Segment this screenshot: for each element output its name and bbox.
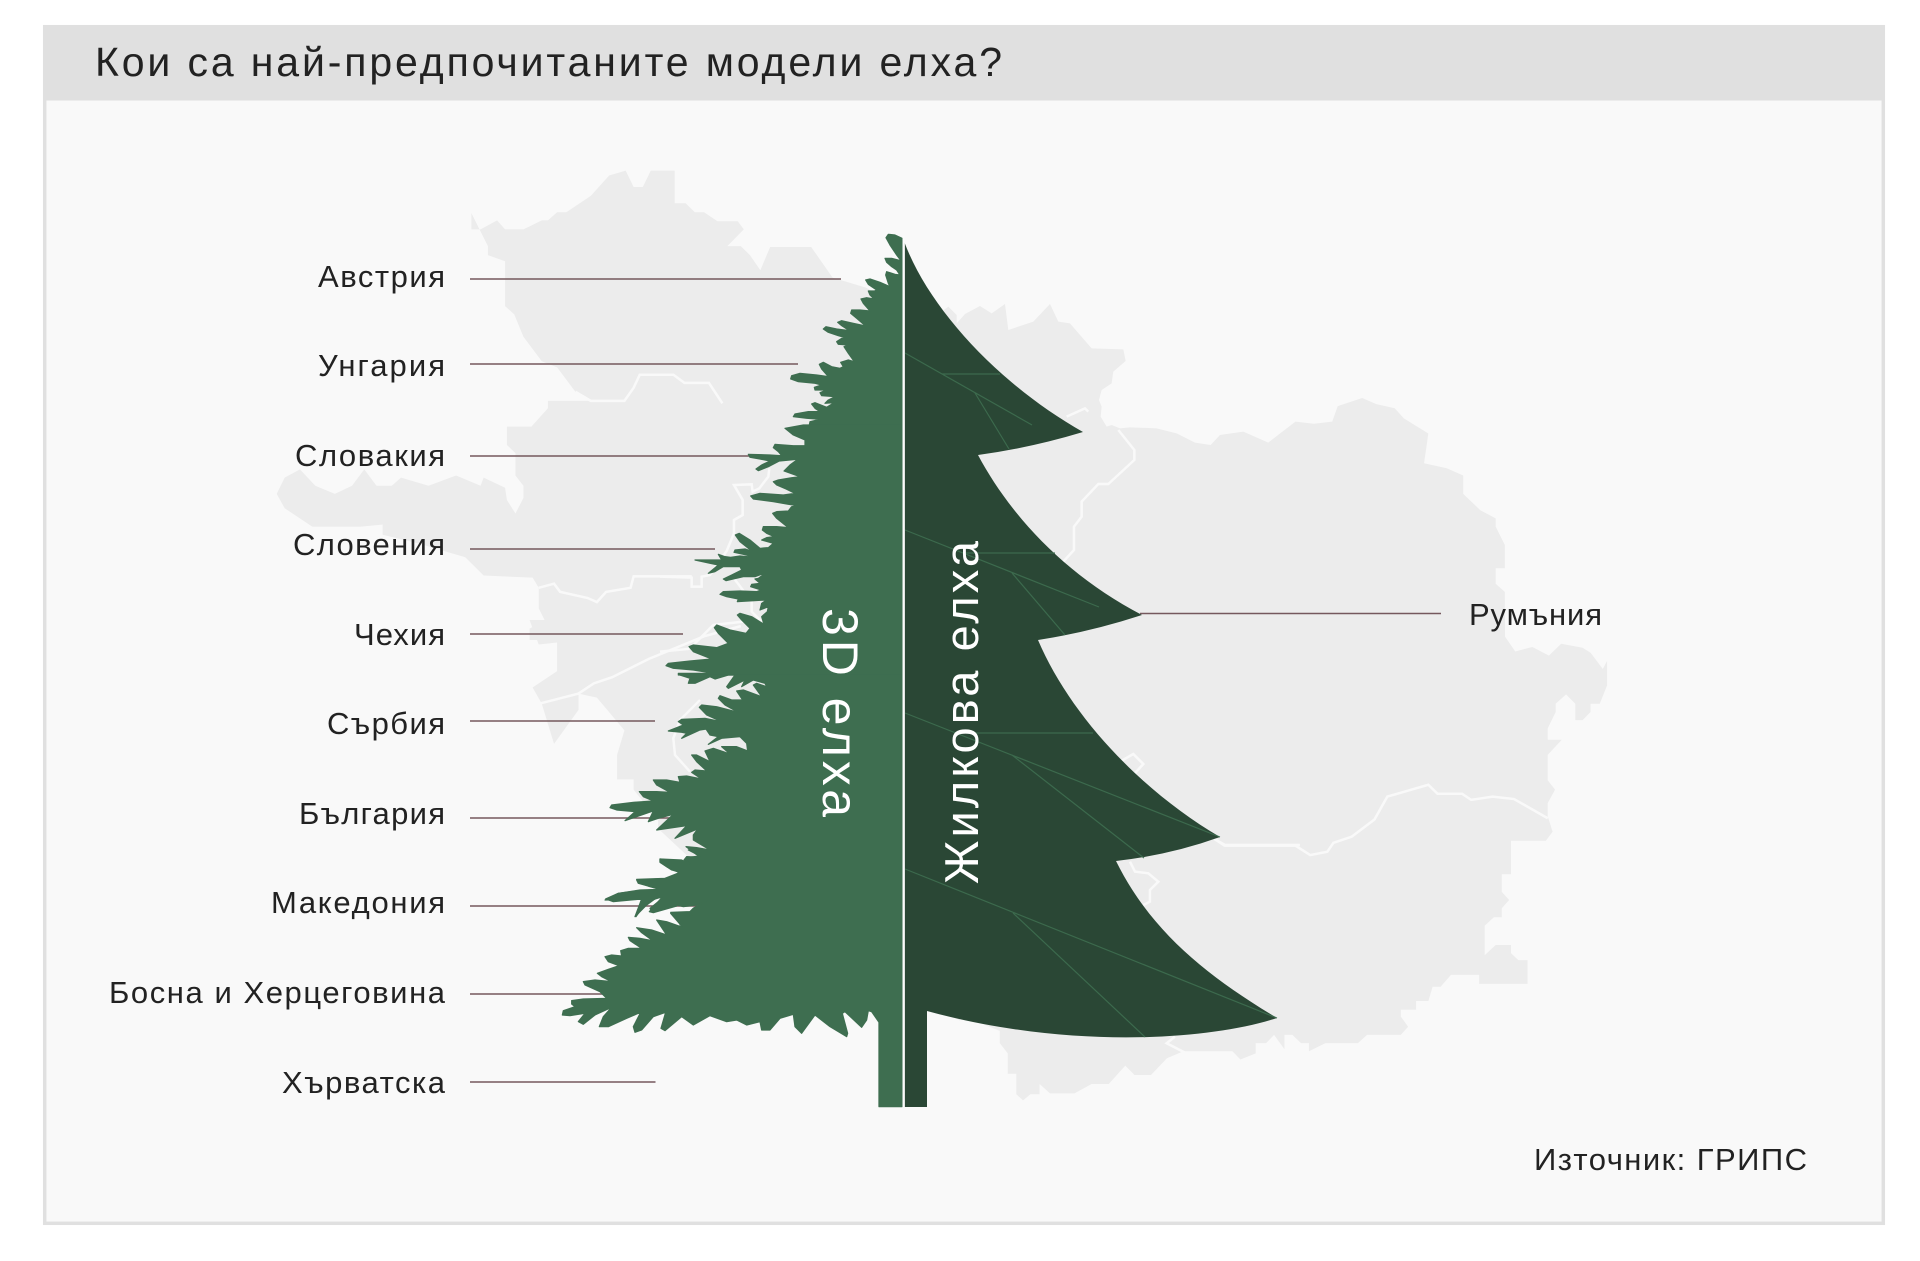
map: eastern Romania: [1268, 398, 1505, 640]
centre divider line: [902, 236, 905, 1107]
leader lines: [470, 279, 1441, 1082]
map: north-west region: [277, 171, 960, 640]
country labels: Хърватска: [282, 1065, 446, 1100]
label: 3D tree: 3D елха: [812, 608, 868, 817]
source note: Източник: ГРИПС: [1534, 1142, 1807, 1177]
title: Кои са най-предпочитаните модели елха?: [95, 39, 1002, 85]
country labels: Словакия: [295, 438, 445, 473]
country labels: [109, 259, 1602, 1100]
tree: live spruce (right half): [905, 243, 1277, 1107]
country labels: Чехия: [354, 617, 445, 652]
background map: [277, 171, 1607, 1100]
country labels: Унгария: [318, 348, 445, 383]
panel: title bar: [43, 25, 1885, 100]
country labels: Румъния: [1469, 597, 1602, 632]
country labels: Австрия: [318, 259, 445, 294]
tree: 3D spruce (left half): [562, 234, 902, 1107]
label: live tree: Жилкова елха: [935, 540, 988, 884]
map: country borders: [539, 375, 1548, 1053]
country labels: България: [299, 796, 445, 831]
map: south-west region: [530, 620, 960, 1021]
country labels: Сърбия: [327, 706, 445, 741]
country labels: Македония: [271, 885, 445, 920]
country labels: Словения: [293, 527, 445, 562]
map: south-east region: [960, 620, 1607, 1100]
country labels: Босна и Херцеговина: [109, 975, 446, 1010]
map: central region: [913, 304, 1268, 720]
